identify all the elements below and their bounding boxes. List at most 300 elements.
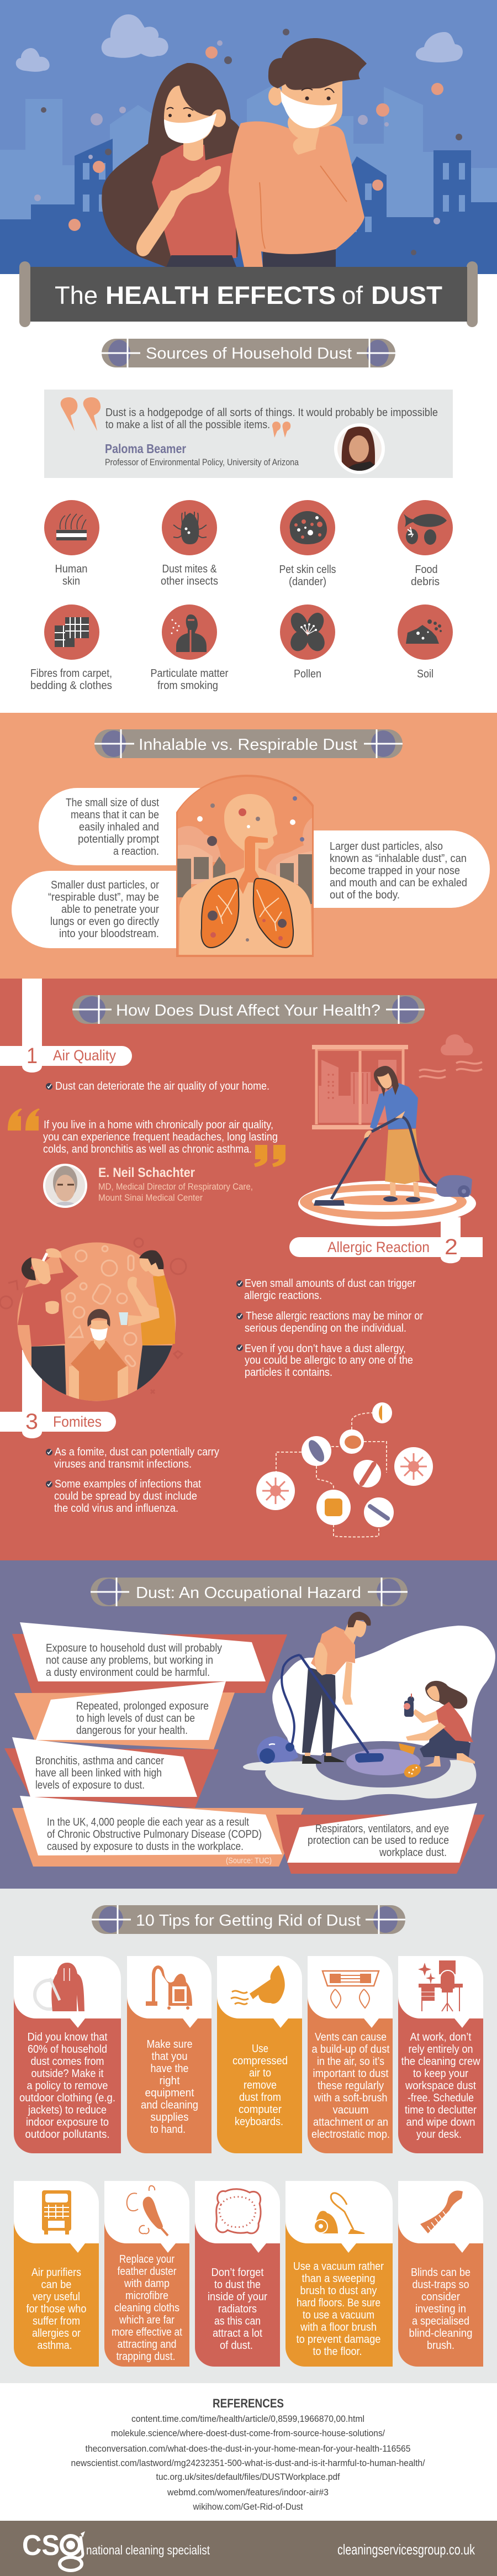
quote text: colds, and bronchitis as well as chronic asthma. <box>43 1143 252 1155</box>
right person with glass <box>119 1250 175 1345</box>
label: debris <box>411 576 440 588</box>
tag: 3 Fomites: Fomites <box>53 1413 102 1430</box>
tip text: microfibre <box>125 2290 168 2302</box>
tip text: vacuum <box>332 2104 369 2116</box>
head <box>349 1619 366 1637</box>
tip text: can be <box>41 2279 72 2291</box>
bullet: serious depending on the individual. <box>245 1322 406 1334</box>
tip text: inside of your <box>208 2291 267 2303</box>
footer <box>0 2521 497 2576</box>
label: Soil <box>417 668 433 680</box>
opening quote mark <box>8 1108 40 1131</box>
card 1: outdoor clothing <box>14 1956 121 2153</box>
buildings <box>177 854 312 904</box>
tip text: consider <box>421 2291 460 2303</box>
label <box>279 564 336 588</box>
tip text: have the <box>150 2063 189 2075</box>
tip text: equipment <box>145 2087 194 2099</box>
tip text: electrostatic mop. <box>311 2128 390 2141</box>
author photo <box>334 423 385 474</box>
label: (dander) <box>289 576 326 588</box>
reference links: webmd.com/women/features/indoor-air#3 <box>167 2487 329 2498</box>
icon: dust mite <box>162 500 217 555</box>
ribbon: respirators <box>276 1803 485 1874</box>
tip text: 60% of household <box>28 2043 107 2055</box>
card 2: right equipment <box>127 1956 212 2153</box>
ribbon: prolonged exposure <box>14 1681 235 1749</box>
tip text: the cleaning crew <box>401 2055 480 2068</box>
tip text: attachment or an <box>313 2116 388 2128</box>
reference links: content.time.com/time/health/article/0,8599,1966870,00.html <box>131 2414 364 2424</box>
tip text: to hand. <box>150 2123 186 2136</box>
tag: 1 Air Quality: 1 <box>27 1044 38 1068</box>
bullets: allergic reaction: allergic reactions. <box>244 1290 322 1302</box>
tip text: remove <box>244 2079 277 2091</box>
vacuum <box>314 1113 472 1206</box>
title banner <box>19 261 478 327</box>
author role: MD, Medical Director of Respiratory Care, <box>98 1181 253 1192</box>
label <box>55 563 87 587</box>
panel: inhalable vs respirable <box>0 713 497 979</box>
bullets: allergic reaction: Even small amounts of dust can trigger <box>245 1278 416 1290</box>
callout: larger particles: become trapped in your nose <box>330 865 460 877</box>
heading <box>94 729 403 758</box>
icon: canister vacuum <box>314 2193 364 2233</box>
white blob <box>272 1626 495 1756</box>
reference links <box>71 2414 425 2512</box>
tip text: At work, don’t <box>410 2031 472 2043</box>
reference links: newscientist.com/lastword/mg24232351-500-what-is-dust-and-is-it-harmful-to-human-health/ <box>71 2458 425 2468</box>
callout: larger particles: out of the body. <box>330 889 400 901</box>
quote text: to make a list of all the possible items. <box>105 419 270 431</box>
quote text: If you live in a home with chronically poor air quality, <box>44 1119 273 1131</box>
icon: fibres <box>44 604 99 660</box>
tip text: trapping dust. <box>116 2351 176 2363</box>
card 8: radiators <box>195 2181 280 2367</box>
tip text: asthma. <box>38 2340 72 2352</box>
author role: Professor of Environmental Policy, University of Arizona <box>105 457 299 467</box>
title text: The <box>55 281 98 309</box>
tip text: right <box>159 2075 180 2087</box>
tip text: Use <box>252 2043 268 2055</box>
ribbon: bronchitis: Bronchitis, asthma and cancer <box>35 1755 164 1767</box>
tip text: suffer from <box>33 2315 80 2327</box>
tip text: a specialised <box>412 2315 469 2327</box>
tip text: Don’t forget <box>211 2267 264 2279</box>
panel: how does dust affect your health <box>0 979 497 1560</box>
label: from smoking <box>157 680 218 692</box>
references <box>71 2396 425 2512</box>
ribbon: bronchitis: levels of exposure to dust. <box>35 1779 145 1791</box>
tip text: to prevent damage <box>296 2333 381 2346</box>
closing quote mark <box>272 422 290 438</box>
dust particles <box>34 29 462 255</box>
tip text: attract a lot <box>213 2327 262 2340</box>
cloud and wind <box>419 1034 482 1078</box>
bullet: could be spread by dust include <box>54 1490 197 1502</box>
tip text: to dust the <box>214 2279 261 2291</box>
tip text: and cleaning <box>141 2099 198 2111</box>
ribbon: prolonged exposure: Repeated, prolonged exposure <box>76 1700 209 1712</box>
bullets: allergic reaction <box>236 1278 423 1379</box>
tip text: in the air, so it’s <box>317 2055 384 2068</box>
bullet <box>236 1310 423 1334</box>
tip text: a policy to remove <box>27 2080 108 2092</box>
quote: Schachter <box>8 1108 285 1208</box>
tip text: a build-up of dust <box>311 2043 390 2055</box>
tip text: Air purifiers <box>31 2267 81 2279</box>
tip text: these regularly <box>318 2080 384 2092</box>
callout: larger particles <box>309 830 490 908</box>
arms <box>406 1709 446 1741</box>
feet <box>424 1753 475 1767</box>
title text: of <box>342 281 363 309</box>
card 9: vacuum over brush <box>285 2181 393 2367</box>
label: Pet skin cells <box>279 564 336 576</box>
panel: expert quote <box>44 390 453 478</box>
callout: smaller particles: able to penetrate your <box>61 903 159 916</box>
medicine pattern <box>66 1246 136 1368</box>
label: bedding & clothes <box>30 680 112 692</box>
closing quote mark <box>254 1145 285 1167</box>
bullets: fomites <box>46 1446 219 1515</box>
tip text <box>311 2031 390 2141</box>
vacuum <box>257 1655 384 1764</box>
label <box>150 667 229 692</box>
heading: Sources of Household Dust: Sources of Household Dust <box>146 345 352 362</box>
tip text: cleaning cloths <box>114 2302 179 2314</box>
icon: air purifier <box>42 2190 71 2235</box>
tip text: that you <box>151 2051 188 2063</box>
tip text <box>19 2031 115 2141</box>
tip text: more effective at <box>112 2326 182 2338</box>
tag: 3 Fomites: 3 <box>25 1410 38 1434</box>
tip text: time to declutter <box>405 2104 477 2116</box>
heading: 10 Tips for Getting Rid of Dust <box>136 1912 361 1930</box>
tagline: national cleaning specialist <box>86 2543 210 2557</box>
reference links: tuc.org.uk/sites/default/files/DUSTWorkplace.pdf <box>156 2472 340 2482</box>
tip text: workspace dust <box>405 2080 476 2092</box>
tip text: investing in <box>415 2303 466 2315</box>
brush <box>399 1743 415 1754</box>
tip text: computer <box>239 2104 282 2116</box>
tip text <box>112 2253 182 2363</box>
tip text: compressed <box>232 2055 288 2067</box>
vacuum tube <box>300 1655 368 1753</box>
heading: Sources of Household Dust <box>102 339 395 367</box>
bronchi <box>216 890 236 924</box>
tag: 2 Allergic Reaction <box>289 1217 483 1263</box>
tip text <box>141 2038 198 2136</box>
bullet: These allergic reactions may be minor or <box>246 1310 423 1322</box>
reference links: molekule.science/where-doest-dust-come-from-source-house-solutions/ <box>111 2428 385 2438</box>
tip text: to the floor. <box>313 2346 362 2358</box>
tip text: with damp <box>124 2278 170 2290</box>
heading <box>72 995 425 1024</box>
tip text: your desk. <box>416 2128 462 2141</box>
window <box>312 1045 408 1129</box>
body <box>179 794 312 955</box>
heading <box>91 1578 408 1606</box>
callout: larger particles: Larger dust particles, also <box>330 840 443 853</box>
icon: pollen <box>280 604 335 660</box>
quote text: you can experience frequent headaches, long lasting <box>43 1131 278 1143</box>
sweater <box>370 1083 418 1130</box>
panel: 10 tips <box>0 1889 497 2383</box>
quote author: Paloma Beamer <box>105 441 186 456</box>
bullet: the cold virus and influenza. <box>54 1502 178 1515</box>
tip text: radiators <box>218 2303 257 2315</box>
clouds <box>16 14 463 72</box>
tip text: hard floors. Be sure <box>297 2297 380 2309</box>
tip text: to keep your <box>413 2068 468 2080</box>
ribbon: household dust <box>12 1622 287 1693</box>
woman with mask <box>102 63 246 267</box>
label: Fibres from carpet, <box>30 667 112 680</box>
ribbon: prolonged exposure: to high levels of dust can be <box>76 1712 195 1725</box>
tip text: outdoor clothing (e.g. <box>19 2092 115 2104</box>
trachea <box>237 836 268 894</box>
label: Human <box>55 563 87 575</box>
ribbon: household dust: a dusty environment could be harmful. <box>46 1666 210 1679</box>
icon: hoodie <box>35 1963 84 2011</box>
author role: Mount Sinai Medical Center <box>98 1192 203 1203</box>
masked man <box>69 1309 128 1401</box>
tip text: of dust. <box>220 2340 253 2352</box>
dashed connectors <box>276 1413 387 1537</box>
tag: 3 Fomites <box>0 1410 116 1438</box>
header illustration <box>0 0 497 274</box>
skirt <box>385 1129 420 1184</box>
tip text: brush to dust any <box>300 2285 377 2297</box>
ribbon: COPD statistic: of Chronic Obstructive Pulmonary Disease (COPD) <box>47 1828 262 1841</box>
rug <box>298 1181 476 1226</box>
tip text: brush. <box>427 2340 454 2352</box>
icon: pet dander <box>280 500 335 555</box>
heading: How Does Dust Affect Your Health? <box>116 1002 380 1019</box>
ribbon: household dust: not cause any problems, but working in <box>46 1654 213 1666</box>
tag: 2 Allergic Reaction: Allergic Reaction <box>327 1239 430 1255</box>
title text: DUST <box>371 281 442 309</box>
label: Pollen <box>294 668 321 680</box>
bullets: fomites: viruses and transmit infections. <box>54 1458 192 1470</box>
building windows <box>83 163 465 247</box>
callout: smaller particles: lungs or even go directly <box>50 916 159 928</box>
reference links: theconversation.com/what-does-the-dust-in-your-home-mean-for-your-health-116565 <box>85 2443 411 2454</box>
icon: soil <box>398 604 453 660</box>
card 7: feather duster <box>104 2181 189 2367</box>
card 4: vents <box>308 1956 393 2153</box>
label <box>411 564 440 588</box>
tip text <box>401 2031 480 2141</box>
ribbon: respirators: workplace dust. <box>379 1847 447 1859</box>
tip text: outside? Make it <box>31 2068 104 2080</box>
sponge <box>402 1762 423 1780</box>
spray bottle <box>404 1701 414 1717</box>
icon: smoking particulates <box>162 604 217 660</box>
left person with eye drops <box>18 1248 78 1362</box>
tip text: which are far <box>119 2314 175 2326</box>
author photo <box>43 1164 87 1208</box>
ribbon: respirators: Respirators, ventilators, and eye <box>315 1823 449 1835</box>
card 3: compressed air <box>217 1956 302 2153</box>
tag: 2 Allergic Reaction: 2 <box>445 1235 458 1259</box>
man <box>300 1612 371 1764</box>
callout: small size <box>39 788 210 865</box>
reference links: wikihow.com/Get-Rid-of-Dust <box>193 2501 303 2512</box>
tip text: dust from <box>239 2091 281 2104</box>
crouching woman <box>399 1681 475 1780</box>
tip text: keyboards. <box>235 2116 283 2128</box>
germs network <box>256 1402 433 1537</box>
illustration: cleaning couple <box>243 1612 495 1800</box>
icon: human skin <box>44 500 99 555</box>
callout: smaller particles: Smaller dust particles, or <box>51 879 159 891</box>
label <box>30 667 112 692</box>
germs <box>372 1402 392 1423</box>
tip text: air to <box>249 2067 271 2079</box>
icon: food debris <box>398 500 453 555</box>
heading: Inhalable vs. Respirable Dust <box>139 736 357 754</box>
quote text <box>43 1119 278 1155</box>
callout: small size: means that it can be <box>71 809 159 821</box>
tip text: for those who <box>27 2303 86 2315</box>
pants <box>31 1345 66 1395</box>
tip text <box>409 2267 473 2352</box>
tip text: blind-cleaning <box>409 2327 473 2340</box>
callout: smaller particles: “respirable dust”, may be <box>48 891 159 903</box>
tip text: outdoor pollutants. <box>25 2128 109 2141</box>
tip text: with a soft-brush <box>314 2092 388 2104</box>
tip text: dust-traps so <box>412 2279 469 2291</box>
tip text <box>232 2043 288 2128</box>
heading: Dust: An Occupational Hazard <box>136 1584 361 1602</box>
dark buildings <box>0 139 497 274</box>
callout: small size: a reaction. <box>113 845 159 858</box>
quote text: Dust is a hodgepodge of all sorts of things. It would probably be impossible <box>105 407 438 419</box>
tip text: rely entirely on <box>409 2043 473 2055</box>
floor <box>243 1760 476 1800</box>
source note: (Source: TUC) <box>226 1856 272 1865</box>
references: REFERENCES <box>213 2396 284 2410</box>
logo <box>22 2530 85 2570</box>
background buildings <box>0 34 497 221</box>
label: other insects <box>161 575 218 587</box>
ribbon: bronchitis <box>4 1737 219 1808</box>
bullet: you could be allergic to any one of the <box>245 1354 413 1366</box>
label: skin <box>62 575 80 587</box>
icon: vent <box>322 1971 379 2008</box>
sources icon grid <box>30 500 453 692</box>
tip text: important to dust <box>313 2068 389 2080</box>
ribbon: COPD statistic: In the UK, 4,000 people die each year as a result <box>47 1816 249 1828</box>
panel: occupational hazard <box>0 1560 497 1889</box>
heading <box>92 1905 405 1934</box>
shirt <box>435 1702 473 1742</box>
label <box>161 563 218 587</box>
tip text <box>208 2267 267 2352</box>
tip text: jackets) to reduce <box>28 2104 107 2116</box>
bullet <box>236 1343 413 1379</box>
tag: 1 Air Quality <box>0 979 132 1073</box>
bullet: Even if you don’t have a dust allergy, <box>245 1343 406 1355</box>
label: Food <box>415 564 437 576</box>
title text: HEALTH EFFECTS <box>105 281 336 309</box>
bullet: particles it contains. <box>245 1366 332 1379</box>
tip text: indoor exposure to <box>26 2116 109 2128</box>
callout: small size: potentially prompt <box>78 833 159 845</box>
ribbon: COPD statistic: caused by exposure to dusts in the workplace. <box>47 1841 244 1853</box>
author role <box>98 1181 253 1203</box>
tip text <box>27 2267 86 2352</box>
ribbon: bronchitis: have all been linked with high <box>35 1767 162 1779</box>
rug <box>316 1741 451 1788</box>
icon: dust cloud <box>216 2189 261 2233</box>
author name: E. Neil Schachter <box>98 1165 195 1180</box>
callout: larger particles: and mouth and can be exhaled <box>330 877 467 889</box>
card 10: blinds <box>398 2181 483 2367</box>
ribbon: prolonged exposure: dangerous for your health. <box>76 1725 188 1737</box>
card 5: workspace <box>398 1956 483 2153</box>
legs <box>390 1182 420 1197</box>
tip text: attracting and <box>117 2338 177 2351</box>
title text <box>55 281 442 309</box>
tip text: feather duster <box>117 2265 177 2278</box>
icon: blind brush <box>420 2191 463 2233</box>
quote text <box>105 407 438 431</box>
tip text: as this can <box>214 2315 261 2327</box>
label: Dust mites & <box>162 563 217 575</box>
label: Particulate matter <box>150 667 229 680</box>
bullets: fomites: As a fomite, dust can potentially carry <box>55 1446 219 1458</box>
ribbon: COPD statistic <box>12 1796 304 1867</box>
tip text: Use a vacuum rather <box>293 2260 384 2273</box>
callout: smaller particles: into your bloodstream. <box>59 928 159 940</box>
tip text: with a floor brush <box>300 2321 377 2333</box>
illustration: people around medicines <box>0 1238 186 1413</box>
head <box>374 1066 399 1097</box>
callout: small size: The small size of dust <box>66 797 159 809</box>
tip text: to use a vacuum <box>303 2309 374 2321</box>
tip text: than a sweeping <box>302 2273 376 2285</box>
tip text: Blinds can be <box>411 2267 470 2279</box>
tag: 1 Air Quality: Air Quality <box>53 1047 116 1064</box>
tip text: Did you know that <box>28 2031 108 2043</box>
bullet <box>46 1478 201 1515</box>
faint molecules on red <box>0 1238 186 1394</box>
tip text: Vents can cause <box>315 2031 387 2043</box>
callout: larger particles: known as “inhalable dust”, can <box>330 853 467 865</box>
tip text: Replace your <box>119 2253 175 2265</box>
bullet: Some examples of infections that <box>55 1478 201 1490</box>
man with mask <box>229 38 367 267</box>
pants <box>420 1726 470 1760</box>
ribbon: household dust: Exposure to household dust will probably <box>46 1642 222 1654</box>
icon: vacuum cleaner <box>146 1965 192 2010</box>
tip text: -free. Schedule <box>408 2092 474 2104</box>
illustration: woman vacuuming <box>298 1034 482 1226</box>
callout: smaller particles <box>12 871 188 948</box>
ribbon: respirators: protection can be used to reduce <box>308 1834 449 1847</box>
tip text: dust comes from <box>31 2055 104 2068</box>
tip text <box>293 2260 384 2358</box>
opening quote mark <box>61 397 101 431</box>
tip text: supplies <box>150 2111 189 2123</box>
icon: air gun <box>231 1965 285 2004</box>
shirt <box>311 1626 355 1674</box>
bullet: air quality: Dust can deteriorate the air quality of your home. <box>55 1080 269 1092</box>
tip text: very useful <box>33 2291 80 2303</box>
